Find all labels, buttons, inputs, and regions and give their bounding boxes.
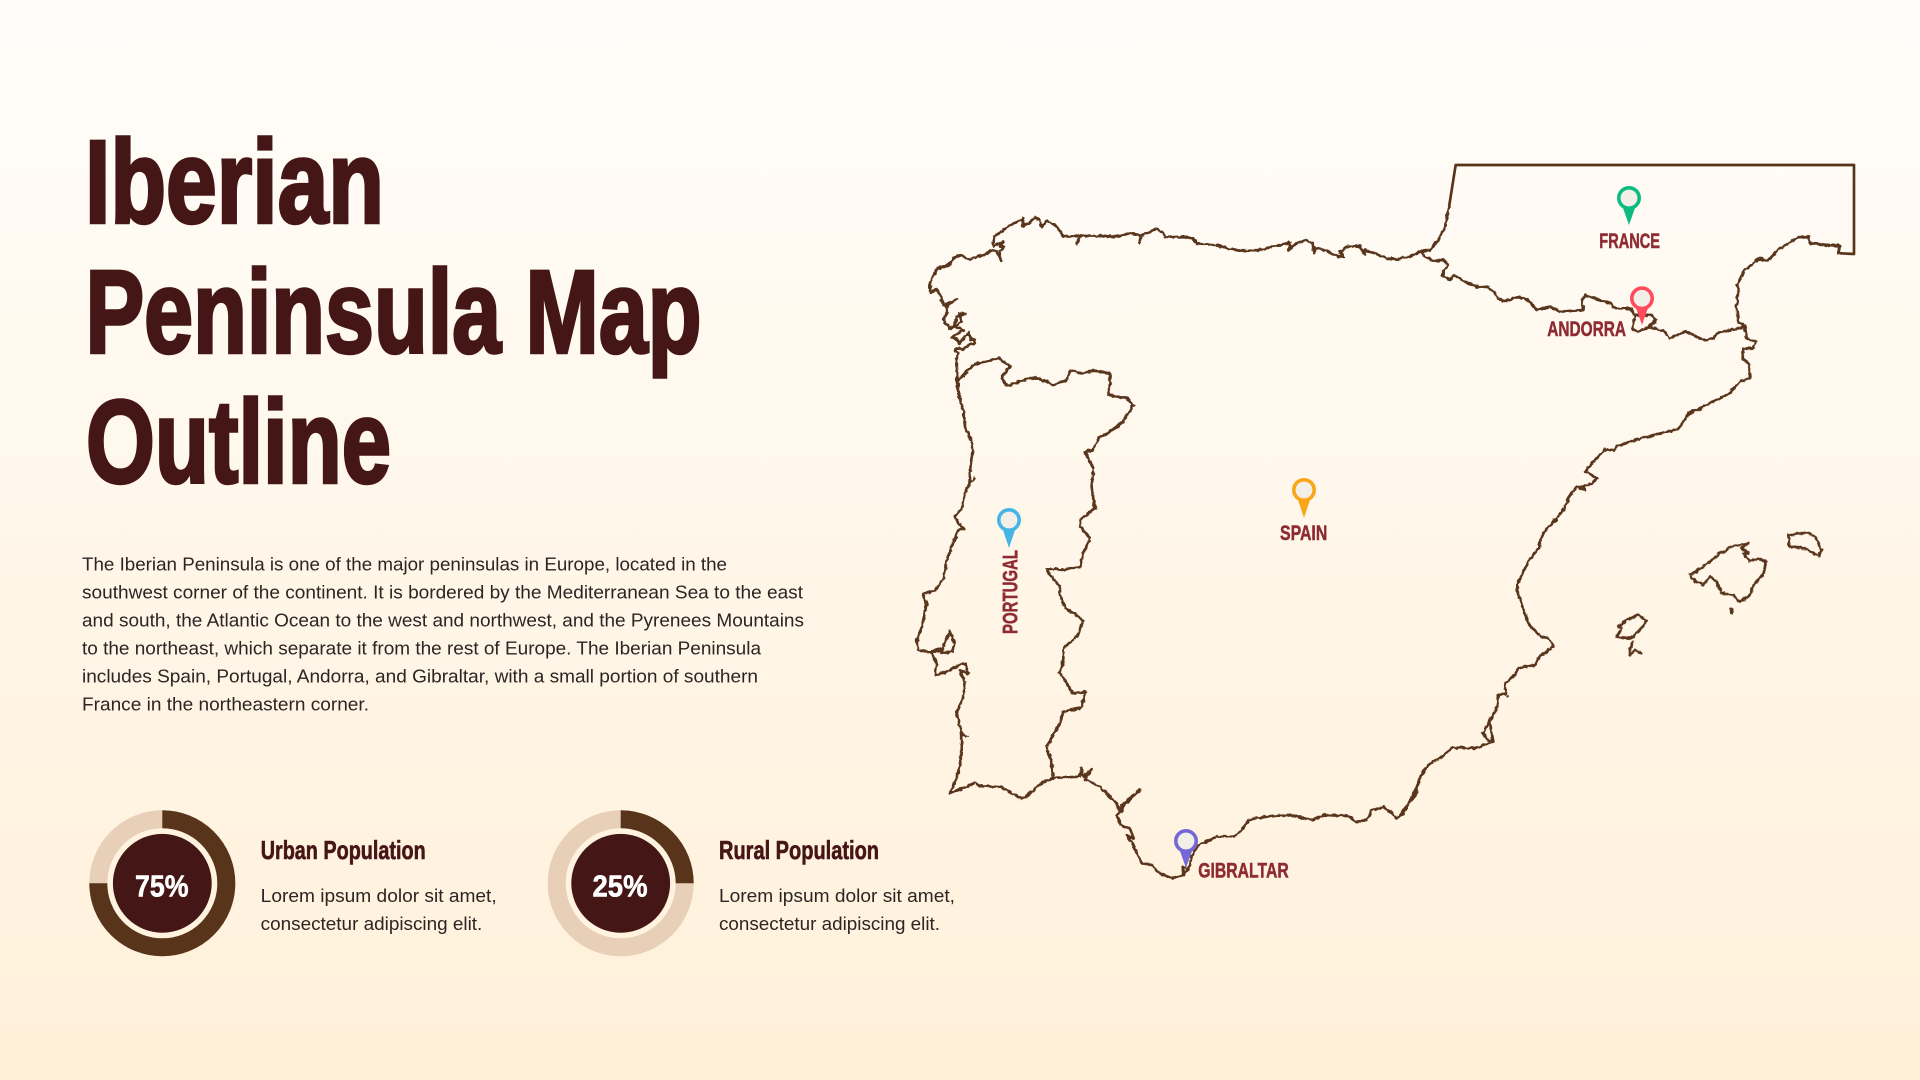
heading: urban population: Urban Population — [261, 837, 426, 865]
description paragraph: France in the northeastern corner. — [82, 694, 369, 715]
pin: Gibraltar — [1176, 831, 1196, 868]
text: rural description: Lorem ipsum dolor sit amet, — [719, 885, 955, 906]
heading: rural population: Rural Population — [719, 837, 879, 865]
description paragraph — [82, 554, 804, 715]
donut chart: 75% — [98, 819, 226, 947]
text: rural description — [719, 885, 955, 934]
donut chart: 25%: 25% — [592, 869, 648, 904]
label: Gibraltar: GIBRALTAR — [1198, 858, 1289, 882]
Portugal-Spain border — [958, 358, 1133, 779]
donut chart: 75%: 75% — [135, 869, 188, 904]
text: rural description: consectetur adipiscing elit. — [719, 913, 940, 934]
description paragraph: includes Spain, Portugal, Andorra, and Gibraltar, with a small portion of southern — [82, 666, 758, 687]
west coast north of Lisbon — [955, 358, 974, 517]
pin: France — [1619, 188, 1639, 225]
title: Outline — [86, 376, 391, 508]
text: urban description: consectetur adipiscing elit. — [261, 913, 482, 934]
label: Portugal: PORTUGAL — [998, 550, 1022, 634]
north-west and north coast — [930, 217, 1420, 358]
map outline of the Iberian Peninsula — [917, 165, 1854, 878]
pin: Andorra — [1632, 288, 1652, 325]
text: urban description — [261, 885, 497, 934]
stat: urban population — [98, 819, 497, 947]
south-east coast — [1400, 520, 1557, 816]
title: Iberian — [85, 116, 384, 248]
French border and Mediterranean coast of Catalonia and Valencia — [1400, 205, 1841, 523]
text: urban description: Lorem ipsum dolor sit amet, — [261, 885, 497, 906]
stat: rural population — [557, 819, 955, 947]
Balearic islands — [1507, 533, 1822, 696]
Pyrenees border — [1421, 252, 1743, 340]
straight frame of southern France — [1449, 165, 1854, 254]
title: Peninsula Map — [86, 246, 702, 378]
description paragraph: southwest corner of the continent. It is bordered by the Mediterranean Sea to the east — [82, 582, 803, 603]
donut chart: 25% — [557, 819, 685, 947]
pin: Portugal — [999, 510, 1019, 548]
label: France: FRANCE — [1599, 229, 1660, 253]
south coast and Atlantic coast of Portugal — [917, 517, 1420, 878]
description paragraph: The Iberian Peninsula is one of the major peninsulas in Europe, located in the — [82, 554, 727, 575]
rough coastlines and borders — [917, 205, 1841, 878]
label: Andorra: ANDORRA — [1547, 317, 1626, 341]
Gibraltar outline — [1183, 867, 1188, 874]
label: Spain: SPAIN — [1280, 521, 1327, 545]
pin: Spain — [1294, 480, 1314, 518]
description paragraph: and south, the Atlantic Ocean to the west and northwest, and the Pyrenees Mountains — [82, 610, 804, 631]
title — [85, 116, 702, 508]
Andorra — [1635, 315, 1656, 327]
description paragraph: to the northeast, which separate it from the rest of Europe. The Iberian Peninsula — [82, 638, 762, 659]
